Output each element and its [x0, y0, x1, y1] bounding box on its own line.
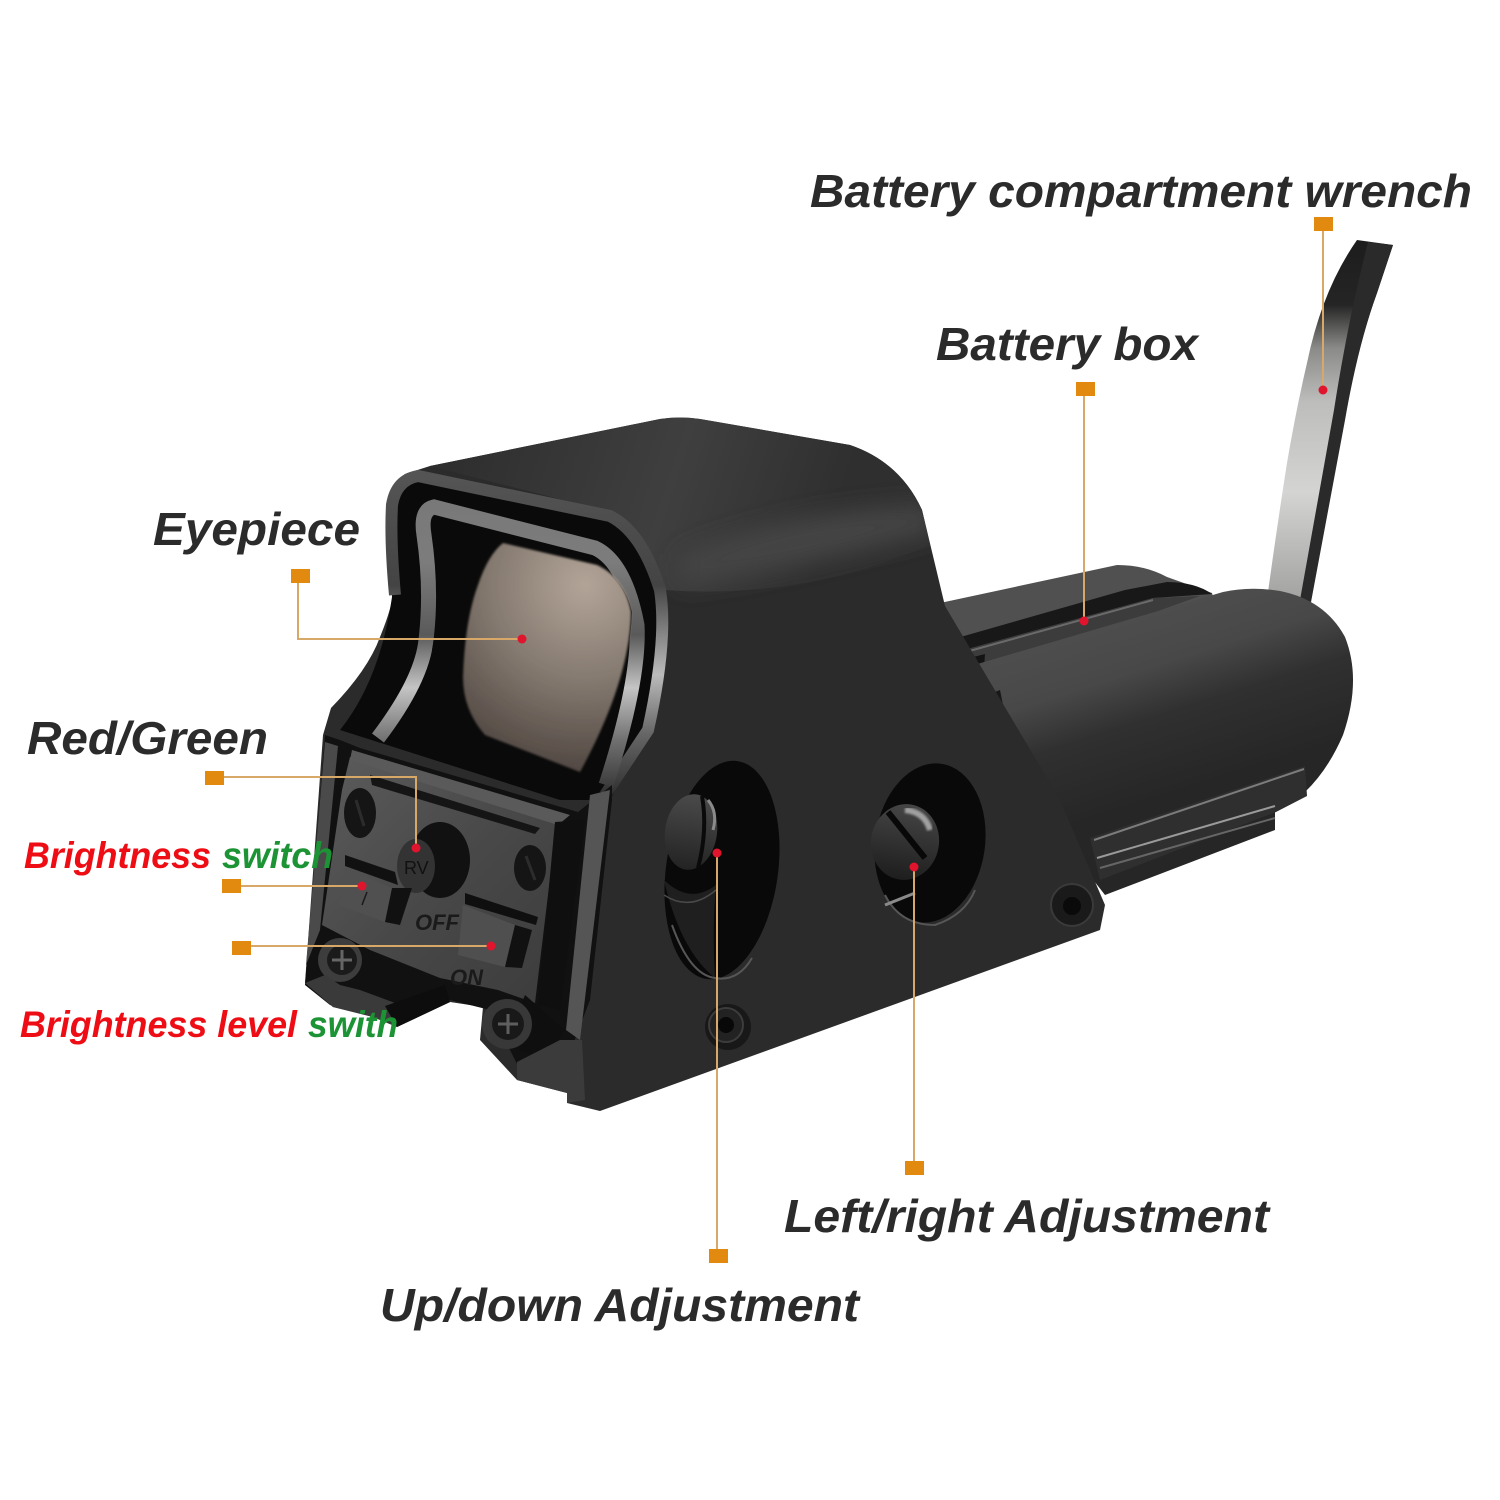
- callout: battery box: Battery box: [936, 318, 1200, 370]
- panel screw upper left: [344, 788, 376, 838]
- infographic: sight parts diagram: [20, 174, 1470, 1330]
- callout: brightness level switch: swith: [308, 1004, 398, 1045]
- callout: brightness level switch: Brightness level: [20, 1004, 298, 1045]
- OFF and ON marks: ON: [450, 965, 484, 990]
- brightness level button: [458, 893, 538, 968]
- callout: brightness switch: switch: [222, 835, 333, 876]
- top surface of housing: [430, 418, 930, 592]
- sight main body: [305, 418, 1105, 1111]
- rotary knob with RV mark: RV: [404, 858, 429, 878]
- callout: left/right adjustment: [784, 862, 1271, 1242]
- mounting screw right: [482, 995, 565, 1060]
- OFF and ON marks: OFF: [415, 910, 460, 935]
- callout: left/right adjustment: Left/right Adjustment: [784, 1190, 1271, 1242]
- callout: battery compartment wrench: [810, 165, 1472, 394]
- mounting screw left: [318, 938, 362, 982]
- panel screw upper right: [514, 845, 546, 891]
- callout: brightness switch: [24, 835, 366, 893]
- up/down adjustment dial recess: [651, 753, 793, 987]
- callout: up/down adjustment: [380, 848, 861, 1331]
- callout: up/down adjustment: Up/down Adjustment: [380, 1279, 861, 1331]
- callout: brightness switch: Brightness: [24, 835, 211, 876]
- callout: eyepiece: [153, 503, 526, 644]
- mount rail: [305, 975, 450, 1027]
- brightness switch button: [338, 855, 412, 925]
- left/right adjustment dial recess: [864, 756, 996, 930]
- lens glass: [463, 543, 631, 772]
- eyepiece frame: [340, 472, 662, 800]
- control panel: [305, 735, 612, 1103]
- callout: red/green: Red/Green: [27, 712, 268, 764]
- callout: red/green: [27, 712, 420, 852]
- hex screw lower: [705, 1004, 751, 1050]
- rear battery compartment: [940, 565, 1225, 690]
- hex screw right: [1051, 884, 1093, 926]
- callout: eyepiece: Eyepiece: [153, 503, 360, 555]
- battery box: [957, 589, 1353, 895]
- callout: battery box: [936, 318, 1200, 626]
- callout: brightness level switch: [20, 941, 496, 1045]
- icon: battery compartment wrench: [1268, 240, 1393, 602]
- rotary knob with RV mark: [397, 822, 470, 898]
- callout: battery compartment wrench: Battery compartment wrench: [810, 165, 1472, 217]
- OFF and ON marks: [415, 910, 484, 990]
